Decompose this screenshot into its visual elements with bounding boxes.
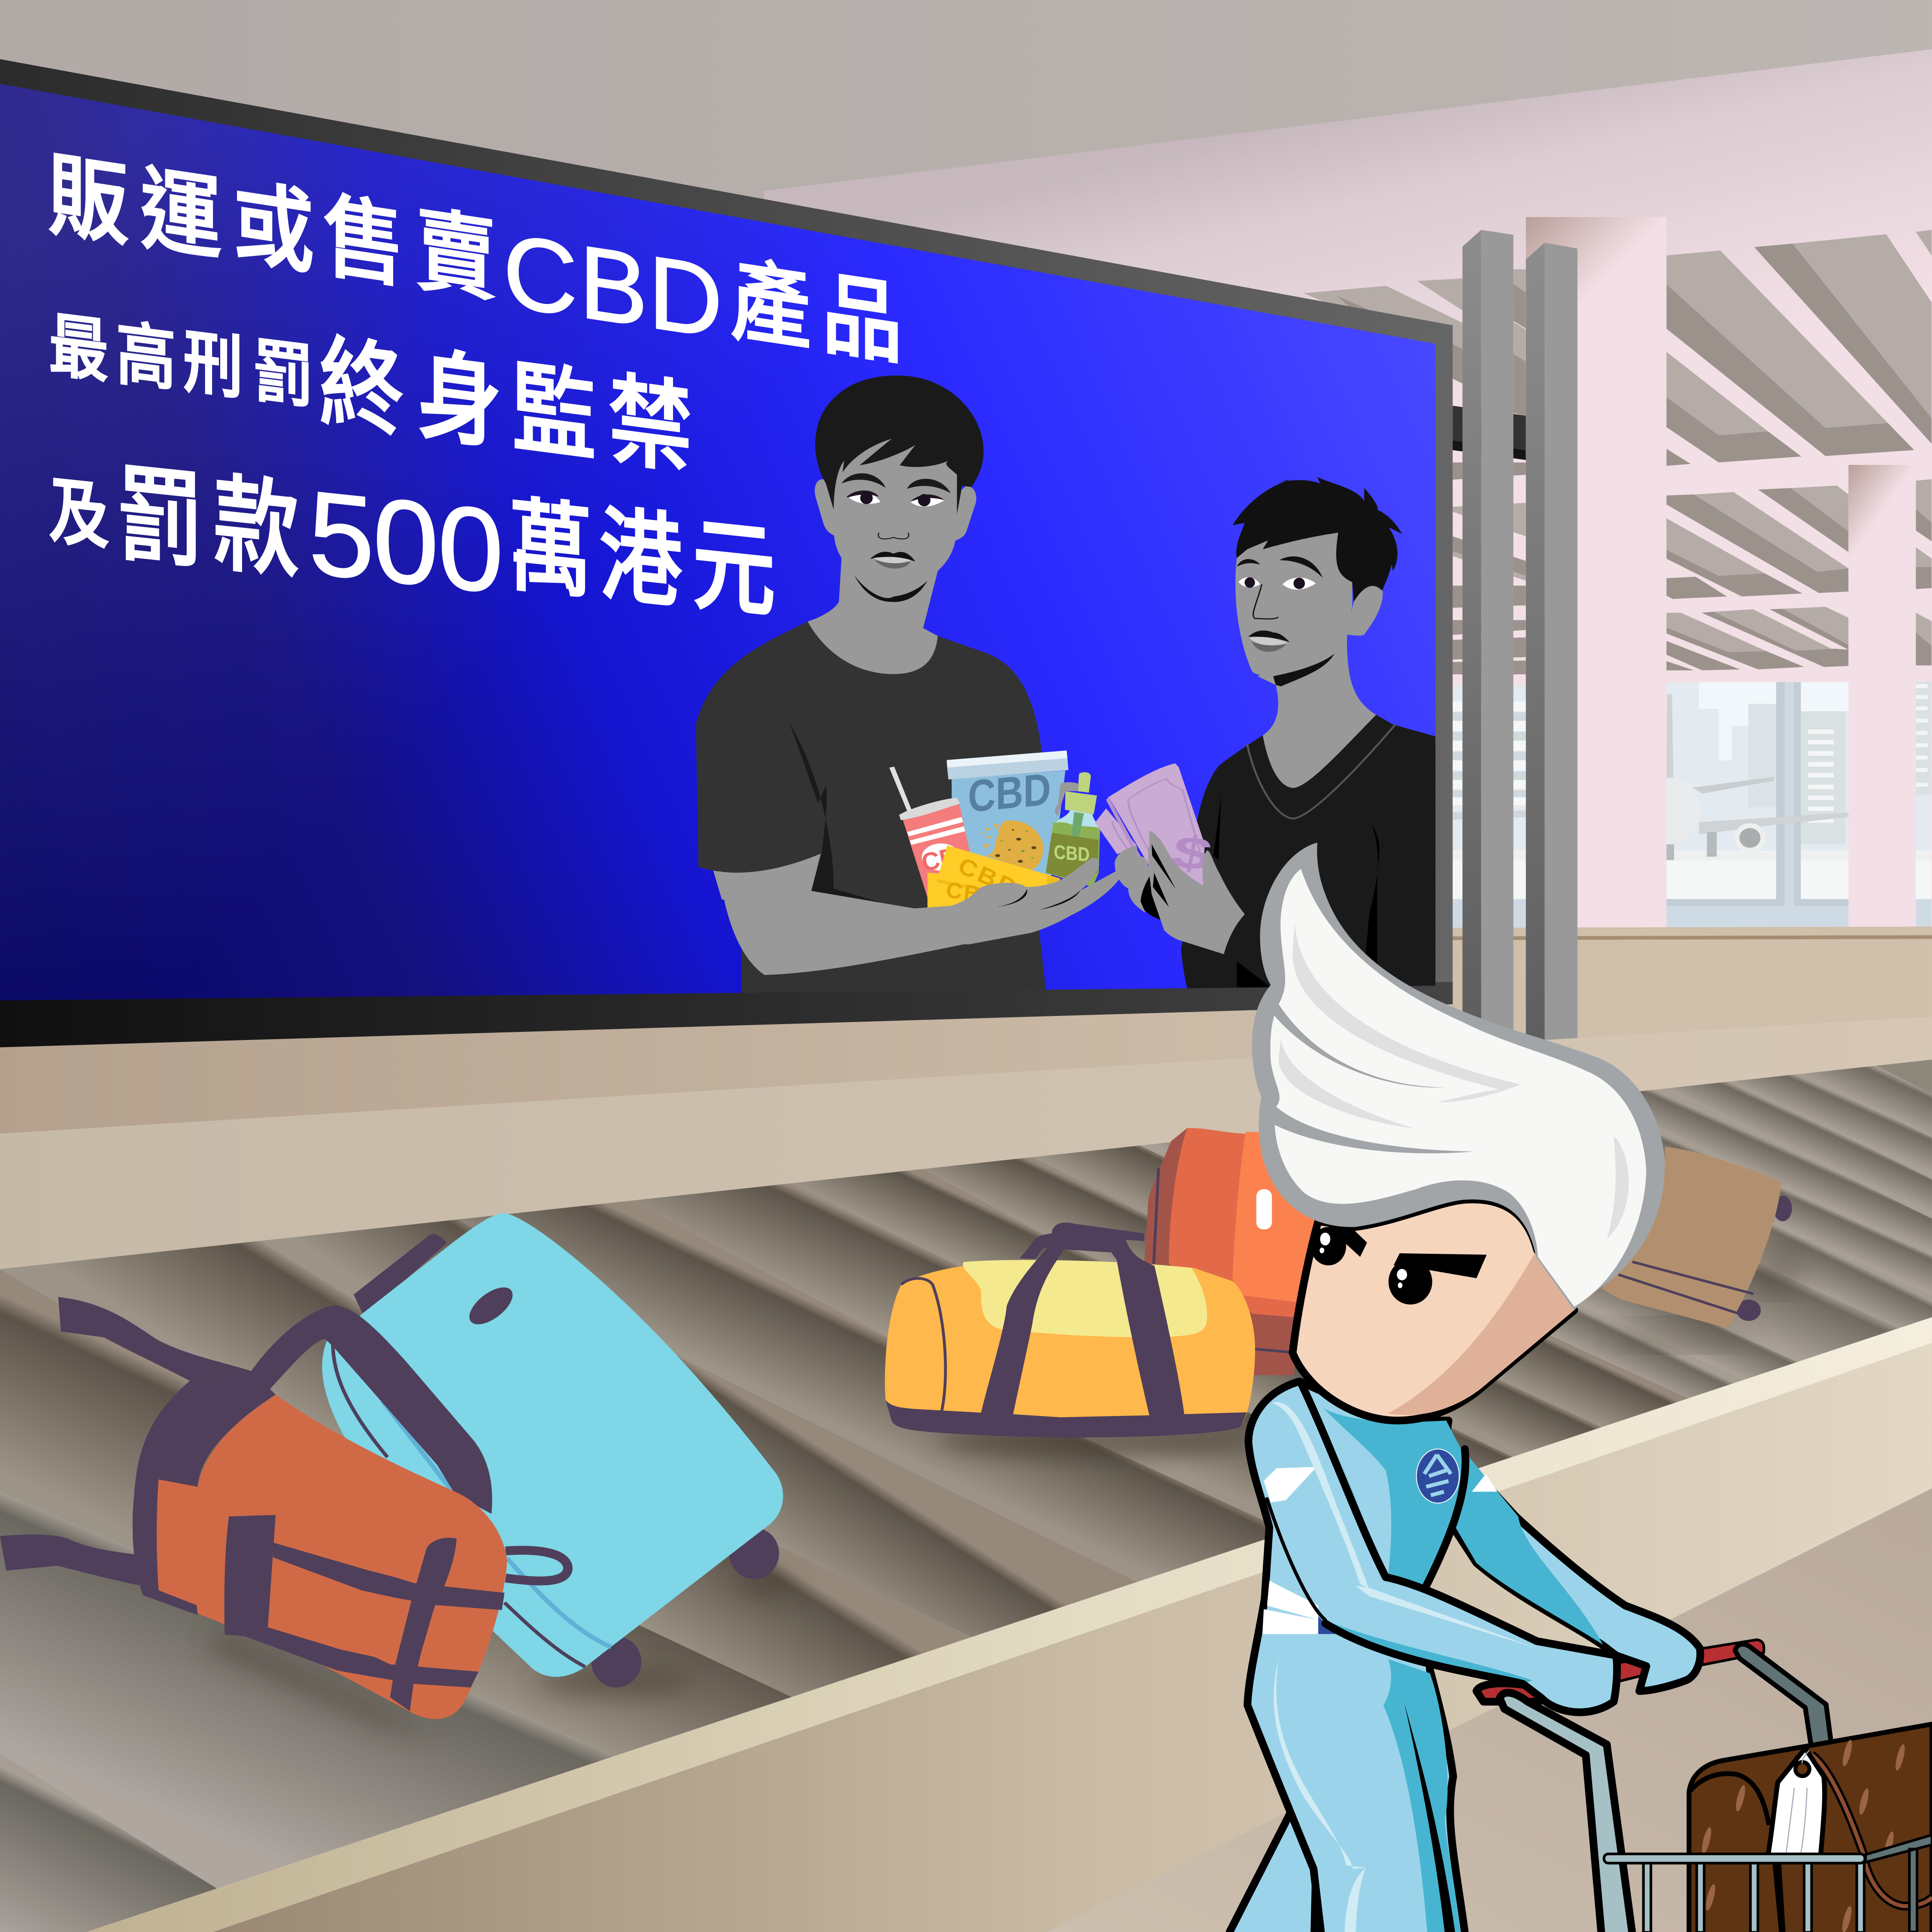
front grip [1477, 1683, 1539, 1701]
screen panel [0, 84, 1435, 1001]
conveyor side walls and floor [0, 1004, 1932, 1932]
title text on screen [48, 144, 903, 631]
two men on screen: $ [1168, 827, 1216, 880]
title text on screen: 罰款 [117, 454, 300, 591]
luggage bag on cart [1604, 1724, 1932, 1932]
front arm [1325, 1577, 1617, 1712]
chest panel [1320, 1406, 1465, 1588]
title text on screen: CBD [503, 212, 722, 360]
light highlights [1272, 1402, 1368, 1932]
front leg shading [1383, 1659, 1465, 1932]
title text on screen: 500 [309, 466, 503, 619]
blue suitcase with orange backpack [0, 1213, 796, 1736]
money bills [1095, 763, 1204, 886]
yellow duffel bag [885, 1222, 1255, 1458]
cart rear handle and red grips [1619, 1640, 1832, 1750]
white belt and marks [1262, 1467, 1328, 1634]
tan suitcase [1602, 1146, 1807, 1345]
title text on screen: 產品 [730, 249, 903, 376]
man left: seller [696, 376, 1047, 1001]
orange suitcase [1144, 1128, 1323, 1375]
torso and front leg [1247, 1381, 1469, 1932]
cart basket [1772, 1862, 1786, 1932]
product group: drink, cookie tub, oil, bars: CB [919, 842, 960, 877]
rear leg [1230, 1808, 1316, 1932]
back wall ledge [1441, 927, 1932, 1084]
screen frame [0, 59, 1453, 1047]
luggage tag [1768, 1748, 1825, 1856]
suitcase body [333, 1213, 783, 1666]
backpack body [157, 1395, 507, 1719]
logo badge [1416, 1449, 1459, 1503]
rear shell [322, 1317, 587, 1677]
arm and hand of left man [719, 858, 1119, 975]
title text on screen: 販運或售賣 [48, 144, 497, 312]
title text on screen: 終身監禁 [319, 326, 693, 486]
white hair [1252, 843, 1665, 1310]
suitcase handle [354, 1234, 447, 1317]
airport window with plane and city [1453, 679, 1932, 928]
suitcase wheels [591, 1528, 779, 1687]
grey support posts [1462, 230, 1577, 1137]
hand of right man [1115, 831, 1245, 954]
cart front handle [1500, 1692, 1637, 1932]
baggage conveyor belt slats [0, 1047, 1932, 1932]
pink columns [1453, 217, 1916, 929]
title text on screen: 萬港元 [509, 488, 776, 631]
two men on screen [696, 376, 1440, 1001]
product group: drink, cookie tub, oil, bars: CBD [944, 877, 1001, 910]
backpack buckles and straps [224, 1515, 504, 1711]
title text on screen: 最高刑罰 [49, 306, 314, 417]
product group: drink, cookie tub, oil, bars [889, 750, 1101, 916]
man right: buyer [1181, 477, 1440, 996]
blurred shadows [208, 1573, 796, 1736]
title text on screen: 及 [49, 471, 110, 558]
backpack straps and loop [0, 1297, 251, 1586]
eyes and brows [1311, 1227, 1346, 1265]
product group: drink, cookie tub, oil, bars: CBD [1054, 841, 1090, 866]
ceiling beams [1453, 230, 1932, 675]
face [1292, 1199, 1574, 1420]
rear arm [1456, 1456, 1700, 1691]
cartoon character in blue suit [1230, 843, 1700, 1932]
product group: drink, cookie tub, oil, bars: CBD [954, 852, 1023, 902]
product group: drink, cookie tub, oil, bars: CBD [968, 764, 1051, 822]
